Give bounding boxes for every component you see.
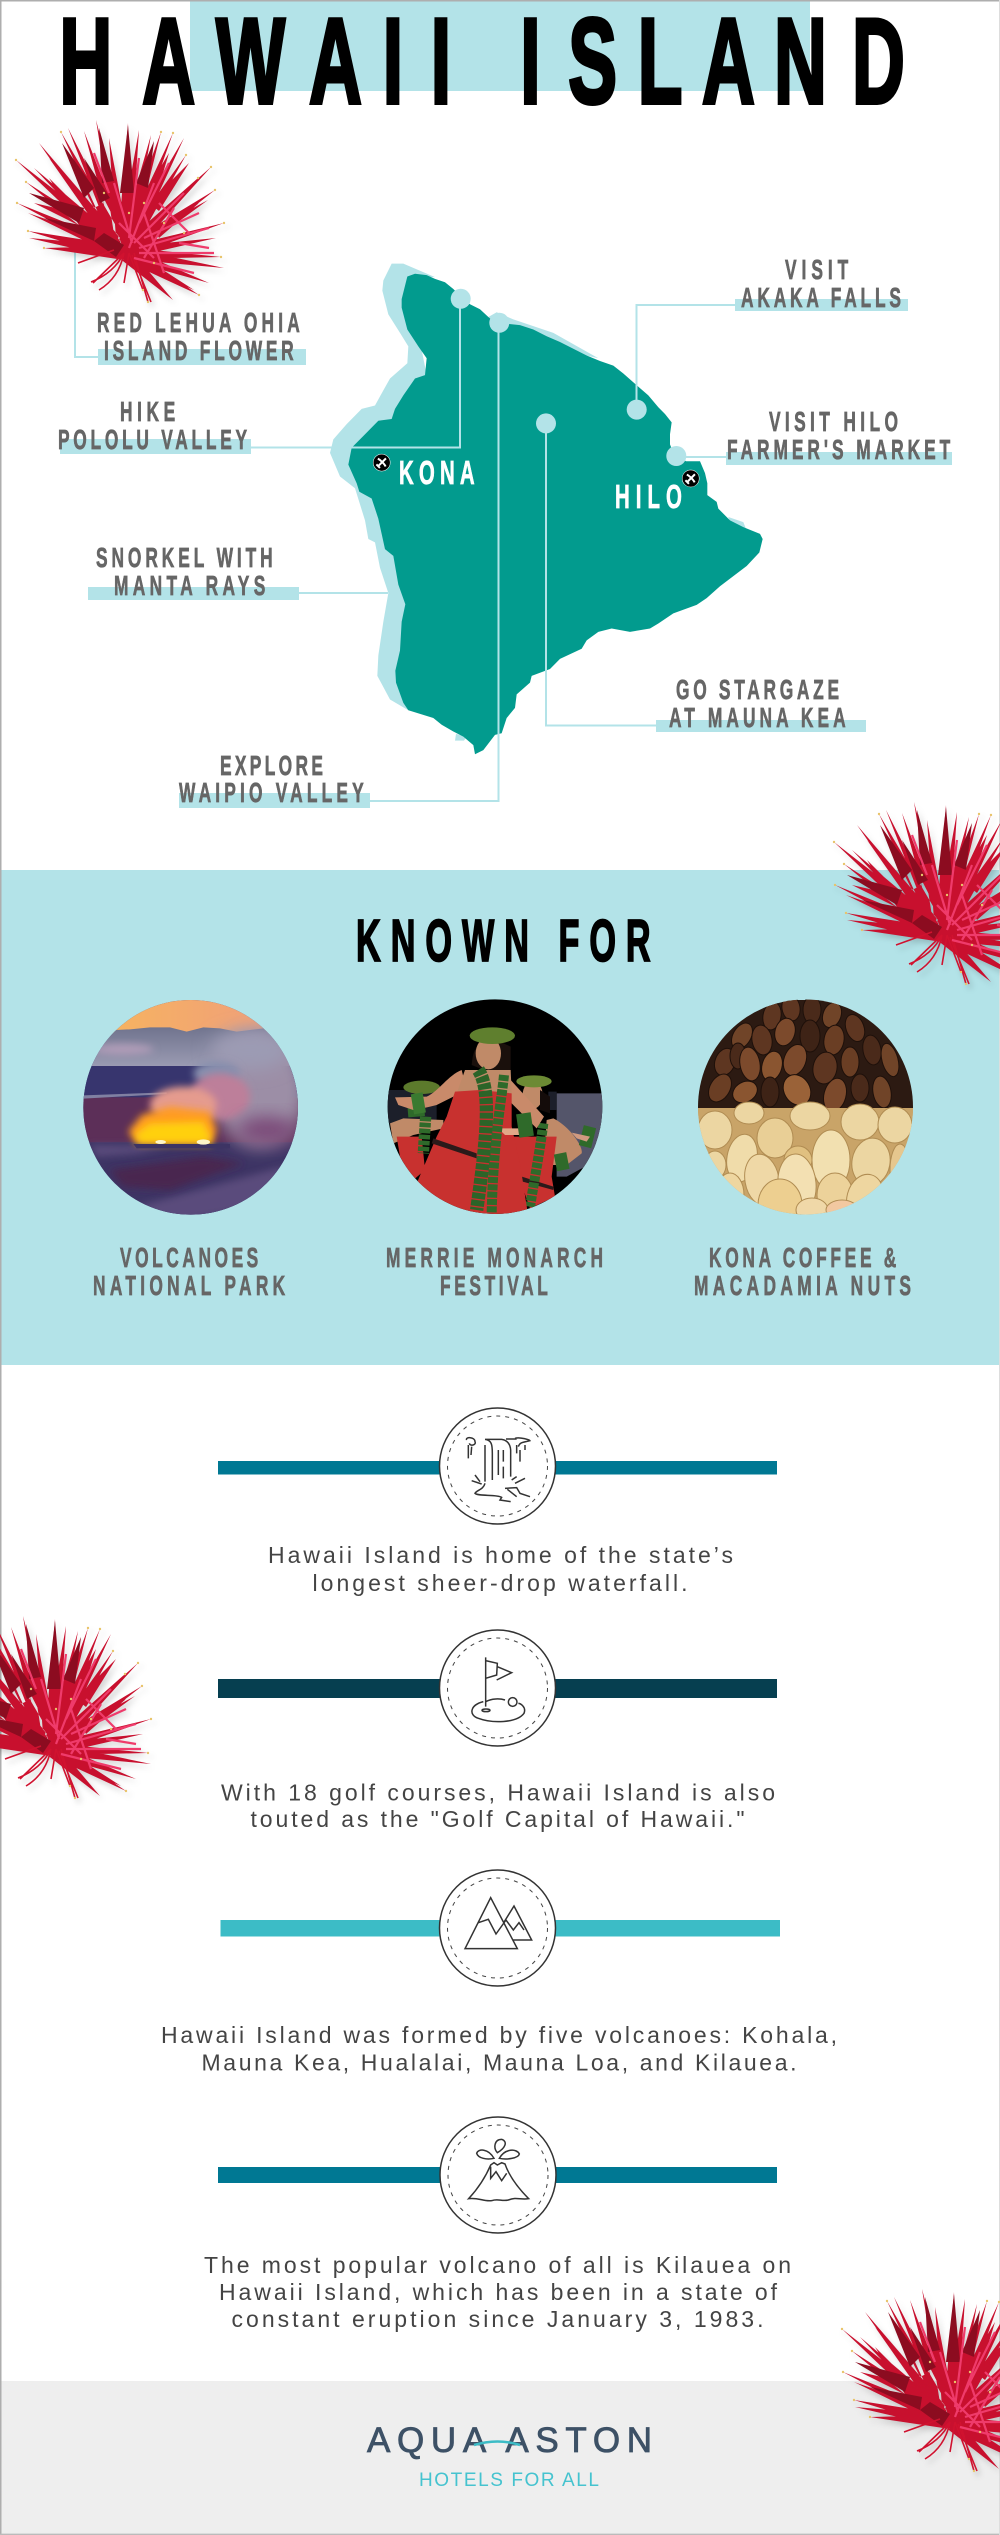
callout: Go stargaze at Mauna Kea: AT MAUNA KEA — [669, 702, 846, 733]
logo swoosh — [474, 2442, 520, 2445]
callout: Explore Waipio Valley: WAIPIO VALLEY — [179, 777, 364, 808]
callout: Go stargaze at Mauna Kea — [656, 674, 866, 733]
caption: Kona coffee and macadamia nuts — [694, 1242, 911, 1301]
callout: Hike Pololu Valley — [58, 396, 251, 455]
icon: waterfall — [440, 1408, 556, 1524]
flower: right of map — [834, 802, 1000, 984]
fact 1: divider bar — [218, 1461, 777, 1474]
callout: Snorkel with manta rays: MANTA RAYS — [114, 570, 265, 601]
callout: Visit Hilo Farmer's Market — [726, 406, 952, 465]
fact 2 text: touted as the "Golf Capital of Hawaii." — [250, 1806, 744, 1832]
callout: Visit Akaka Falls: AKAKA FALLS — [741, 282, 901, 313]
fact 4 text — [204, 2252, 791, 2332]
icon: mountains — [440, 1870, 556, 1986]
fact 3 text — [161, 2022, 837, 2076]
flower: left of facts — [0, 1616, 151, 1798]
fact 1 text: longest sheer-drop waterfall. — [312, 1570, 688, 1596]
icon: golf flag — [440, 1630, 556, 1746]
fact 4: divider bar — [218, 2167, 777, 2183]
photo: volcano — [83, 1000, 298, 1215]
icon: volcano — [440, 2117, 556, 2233]
caption: Kona coffee and macadamia nuts: KONA COFFEE & — [709, 1242, 896, 1273]
photo: hula dancers — [388, 999, 602, 1214]
label: Kona: KONA — [399, 454, 475, 491]
caption: Merrie Monarch Festival — [386, 1242, 603, 1301]
fact 4 text: constant eruption since January 3, 1983. — [232, 2306, 763, 2332]
callout: Visit Hilo Farmer's Market: VISIT HILO — [769, 406, 898, 437]
map landmass — [348, 274, 763, 754]
title highlight block — [190, 0, 810, 91]
map shoreline shadow — [330, 264, 747, 741]
caption: Volcanoes National Park: NATIONAL PARK — [93, 1270, 285, 1301]
heading: Known For: KNOWN FOR — [356, 908, 651, 974]
label: Hilo: HILO — [615, 478, 682, 515]
callout: Snorkel with manta rays — [88, 542, 299, 601]
left dancer — [390, 1118, 443, 1143]
fact 4 text: The most popular volcano of all is Kilauea on — [204, 2252, 791, 2278]
fact 2 text: With 18 golf courses, Hawaii Island is also — [221, 1780, 775, 1806]
callout: Hike Pololu Valley: HIKE — [120, 396, 175, 427]
logo: Aqua Aston: AQUA ASTON — [367, 2421, 652, 2460]
callout: Red Lehua Ohia island flower: RED LEHUA OHIA — [97, 307, 300, 338]
fact 1 text: Hawaii Island is home of the state’s — [268, 1542, 733, 1568]
caption: Volcanoes National Park — [93, 1242, 285, 1301]
icon: Hilo airport — [679, 466, 703, 491]
callout: Go stargaze at Mauna Kea: GO STARGAZE — [676, 674, 839, 705]
callout: Explore Waipio Valley: EXPLORE — [220, 750, 323, 781]
fact 3 text: Hawaii Island was formed by five volcanoes: Kohala, — [161, 2022, 837, 2048]
main dancer — [472, 1043, 510, 1070]
macadamia nuts — [699, 1102, 912, 1214]
caption: Kona coffee and macadamia nuts: MACADAMIA NUTS — [694, 1270, 911, 1301]
photo: coffee and macadamia nuts — [698, 994, 913, 1231]
callout: Snorkel with manta rays: SNORKEL WITH — [96, 542, 273, 573]
fact 4 text: Hawaii Island, which has been in a state of — [219, 2279, 778, 2305]
leader lines — [75, 250, 736, 801]
caption: Merrie Monarch Festival: MERRIE MONARCH — [386, 1242, 603, 1273]
footer band — [0, 2381, 1000, 2535]
icon: Kona airport — [370, 451, 394, 475]
known for panel background — [0, 870, 1000, 1365]
callout: Hike Pololu Valley: POLOLU VALLEY — [58, 424, 247, 455]
fact 2: divider bar — [218, 1679, 777, 1698]
callout: Explore Waipio Valley — [179, 750, 370, 808]
callout: Red Lehua Ohia island flower — [97, 307, 306, 366]
rear dancer — [543, 1118, 582, 1165]
caption: Volcanoes National Park: VOLCANOES — [120, 1242, 258, 1273]
logo tagline: HOTELS FOR ALL — [419, 2470, 599, 2491]
location dots — [451, 289, 686, 466]
flower: bottom right — [842, 2289, 1000, 2471]
callout: Red Lehua Ohia island flower: ISLAND FLOWER — [104, 335, 294, 366]
fact 2 text — [221, 1780, 775, 1832]
logo: Aqua Aston — [367, 2421, 652, 2491]
callout: Visit Hilo Farmer's Market: FARMER'S MARKET — [727, 434, 950, 465]
fact 3 text: Mauna Kea, Hualalai, Mauna Loa, and Kilauea. — [202, 2050, 796, 2076]
map: Hawaii Island — [75, 250, 763, 801]
fact 3: divider bar — [220, 1920, 780, 1936]
coffee beans — [698, 994, 913, 1116]
flower: top left — [16, 120, 224, 302]
callout: Visit Akaka Falls: VISIT — [785, 254, 848, 285]
fact 1 text — [268, 1542, 733, 1596]
caption: Merrie Monarch Festival: FESTIVAL — [440, 1270, 548, 1301]
callout: Visit Akaka Falls — [735, 254, 908, 313]
